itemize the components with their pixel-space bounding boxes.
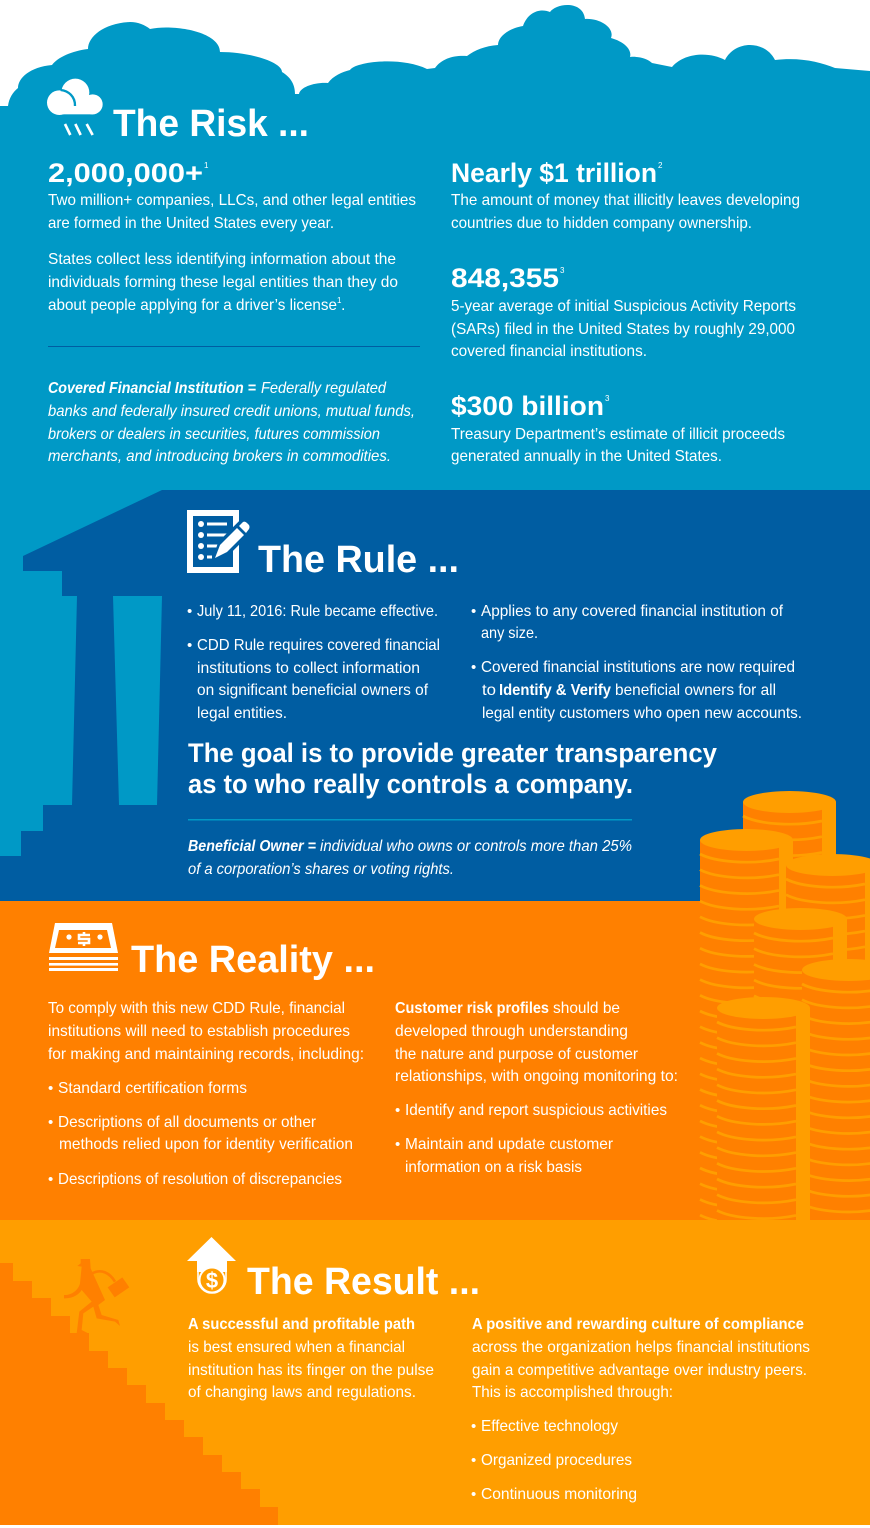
definition: covered financial institution: brokers or dealers in securities, futures commission	[48, 426, 380, 443]
section: The Result	[187, 1237, 810, 1503]
stat: nearly one trillion: Nearly $1 trillion	[451, 158, 657, 188]
stat: two million: are formed in the United States every year.	[48, 215, 334, 232]
bullets: right column: Applies to any covered financial institution of	[481, 603, 784, 620]
text block: procedures: To comply with this new CDD Rule, financial	[48, 1000, 345, 1017]
text block: identifying information: 1	[337, 296, 342, 305]
bullets: right column: •	[471, 603, 476, 620]
bullets: right column: to	[482, 682, 496, 699]
text block: culture of compliance: This is accomplished through:	[472, 1384, 673, 1401]
callout: the goal: as to who really controls a company.	[188, 769, 633, 799]
panel: The Reality background	[0, 901, 870, 1221]
stat: two million: Two million+ companies, LLCs, and other legal entities	[48, 192, 416, 209]
stat: 300 billion: 3	[605, 394, 610, 403]
callout: the goal: The goal is to provide greater transparency	[188, 738, 717, 768]
section: The Rule	[187, 513, 802, 878]
bullets: left column: legal entities.	[197, 705, 287, 722]
text block: customer risk profiles: developed through understanding	[395, 1023, 628, 1040]
icon: stack of money	[49, 923, 118, 971]
bullets: left column: CDD Rule requires covered financial	[197, 637, 440, 654]
panel: The Result background	[0, 1220, 870, 1525]
text block: customer risk profiles: •	[395, 1136, 400, 1153]
text block: procedures: Descriptions of all documents or other	[58, 1114, 317, 1131]
bullets: right column	[471, 603, 802, 722]
definition: beneficial owner: Beneficial Owner =	[188, 838, 316, 855]
text block: culture of compliance: Effective technology	[481, 1418, 618, 1435]
section: The Risk	[47, 79, 800, 465]
text block: profitable path: A successful and profitable path	[188, 1316, 415, 1333]
stat: nearly one trillion: countries due to hidden company ownership.	[451, 215, 752, 232]
panel: The Rule background	[0, 490, 870, 902]
illustration: descending staircase	[0, 1263, 278, 1525]
stat: 848,355: (SARs) filed in the United States by roughly 29,000	[451, 321, 795, 338]
icon: arrow up with dollar coin	[187, 1237, 236, 1293]
bullets: right column: beneficial owners for all	[615, 682, 776, 699]
bullets: left column	[187, 603, 440, 722]
text block: procedures: •	[48, 1114, 53, 1131]
stat: two million	[48, 158, 416, 232]
text block: culture of compliance	[471, 1316, 810, 1503]
text block: identifying information: about people applying for a driver’s license	[48, 297, 337, 314]
definition: covered financial institution: merchants, and introducing brokers in commodities.	[48, 448, 391, 465]
text block: procedures: •	[48, 1080, 53, 1097]
text block: customer risk profiles: Identify and report suspicious activities	[405, 1102, 667, 1119]
text block: procedures: institutions will need to establish procedures	[48, 1023, 350, 1040]
definition: covered financial institution	[48, 380, 415, 465]
text block: culture of compliance: •	[471, 1452, 476, 1469]
text block: culture of compliance: Continuous monitoring	[481, 1486, 637, 1503]
text block: customer risk profiles: Customer risk profiles	[395, 1000, 549, 1017]
definition: beneficial owner: of a corporation’s shares or voting rights.	[188, 861, 454, 878]
text block: culture of compliance: •	[471, 1418, 476, 1435]
illustration: stacks of coins	[700, 791, 870, 1438]
definition: beneficial owner: individual who owns or controls more than 25%	[320, 838, 632, 855]
icon: checklist and pencil	[190, 513, 250, 570]
icon: rain cloud	[47, 79, 103, 135]
text block: customer risk profiles: should be	[553, 1000, 620, 1017]
bullets: left column: on significant beneficial owners of	[197, 682, 429, 699]
text block: procedures: Descriptions of resolution of discrepancies	[58, 1171, 342, 1188]
definition: covered financial institution: Covered Financial Institution =	[48, 380, 256, 397]
stat: nearly one trillion	[451, 158, 800, 232]
panel: The Risk background with cloud outline	[0, 5, 870, 500]
definition: covered financial institution: banks and federally insured credit unions, mutual funds,	[48, 403, 415, 420]
stat: two million: 2,000,000+	[48, 158, 203, 188]
callout: the goal	[188, 738, 717, 799]
definition: covered financial institution: Federally regulated	[261, 380, 387, 397]
text block: customer risk profiles: relationships, with ongoing monitoring to:	[395, 1068, 678, 1085]
stat: 848,355	[451, 263, 796, 360]
stat: 300 billion	[451, 391, 785, 465]
icon: man climbing stairs with briefcase	[64, 1259, 129, 1333]
bullets: left column: •	[187, 637, 192, 654]
heading: The Reality: The Reality ...	[131, 939, 375, 981]
text block: culture of compliance: A positive and rewarding culture of compliance	[472, 1316, 804, 1333]
text block: identifying information: .	[341, 297, 345, 314]
text block: profitable path: is best ensured when a financial	[188, 1339, 405, 1356]
heading: The Result: The Result ...	[247, 1261, 480, 1303]
text block: culture of compliance: •	[471, 1486, 476, 1503]
text block: identifying information: individuals forming these legal entities than they do	[48, 274, 398, 291]
text block: procedures	[48, 1000, 364, 1188]
text block: profitable path: institution has its finger on the pulse	[188, 1362, 434, 1379]
bullets: left column: July 11, 2016: Rule became effective.	[197, 603, 438, 620]
stat: 300 billion: $300 billion	[451, 391, 604, 421]
bullets: left column: •	[187, 603, 192, 620]
text block: customer risk profiles	[395, 1000, 678, 1176]
stat: 300 billion: Treasury Department’s estimate of illicit proceeds	[451, 426, 785, 443]
bullets: right column: Identify & Verify	[499, 682, 611, 699]
bullets: left column: institutions to collect information	[197, 660, 420, 677]
icon: arrow up with dollar coin: $	[206, 1268, 218, 1293]
illustration: classical temple silhouette	[0, 490, 162, 856]
text block: profitable path: of changing laws and regulations.	[188, 1384, 416, 1401]
bullets: right column: •	[471, 659, 476, 676]
stat: 848,355: 848,355	[451, 263, 559, 293]
section: The Reality	[48, 923, 678, 1188]
text block: culture of compliance: Organized procedures	[481, 1452, 632, 1469]
bullets: right column: Covered financial institutions are now required	[481, 659, 795, 676]
text block: customer risk profiles: the nature and purpose of customer	[395, 1046, 639, 1063]
stat: 848,355: 5-year average of initial Suspicious Activity Reports	[451, 298, 796, 315]
text block: customer risk profiles: •	[395, 1102, 400, 1119]
stat: two million: 1	[204, 161, 209, 170]
bullets: right column: any size.	[481, 625, 538, 642]
stat: 848,355: 3	[560, 266, 565, 275]
heading: The Rule: The Rule ...	[258, 539, 459, 581]
stat: 848,355: covered financial institutions.	[451, 343, 647, 360]
text block: customer risk profiles: information on a risk basis	[405, 1159, 582, 1176]
text block: procedures: •	[48, 1171, 53, 1188]
text block: identifying information	[48, 251, 398, 314]
text block: customer risk profiles: Maintain and update customer	[405, 1136, 614, 1153]
text block: procedures: methods relied upon for identity verification	[59, 1136, 353, 1153]
stat: 300 billion: generated annually in the United States.	[451, 448, 722, 465]
text block: culture of compliance: across the organization helps financial institutions	[472, 1339, 810, 1356]
stat: nearly one trillion: The amount of money that illicitly leaves developing	[451, 192, 800, 209]
text block: profitable path	[188, 1316, 434, 1401]
text block: culture of compliance: gain a competitive advantage over industry peers.	[472, 1362, 807, 1379]
stat: nearly one trillion: 2	[658, 161, 663, 170]
text block: procedures: Standard certification forms	[58, 1080, 247, 1097]
text block: procedures: for making and maintaining records, including:	[48, 1046, 364, 1063]
bullets: right column: legal entity customers who open new accounts.	[482, 705, 802, 722]
heading: The Risk: The Risk ...	[113, 103, 309, 145]
text block: identifying information: States collect less identifying information about the	[48, 251, 396, 268]
definition: beneficial owner	[188, 838, 632, 878]
